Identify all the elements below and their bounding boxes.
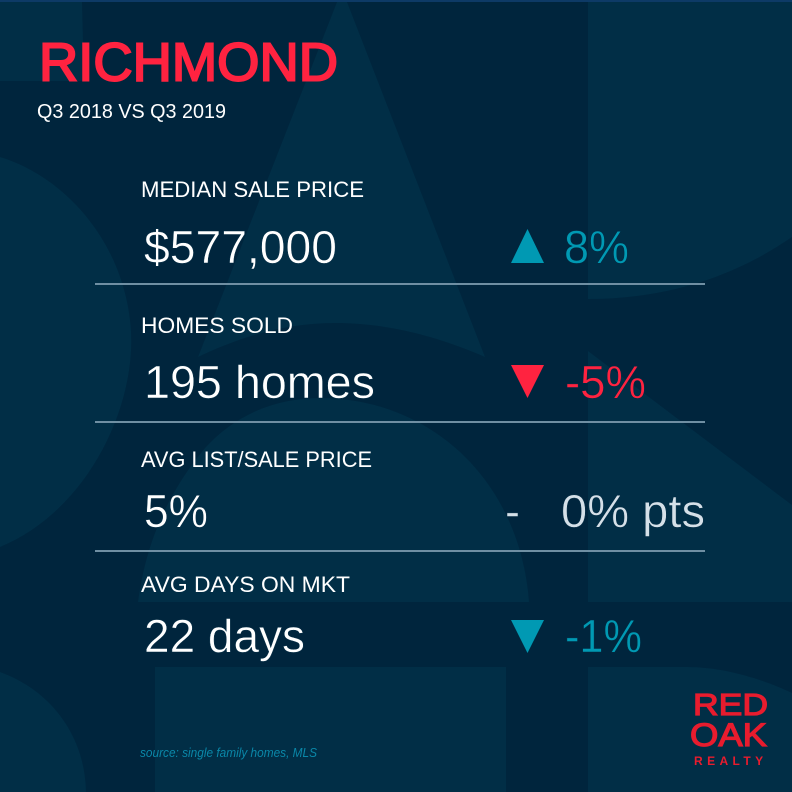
value: 22 days: 22 days — [144, 610, 305, 662]
value: median sale price: $577,000 — [144, 221, 337, 273]
change: -5%: -5% — [565, 356, 646, 408]
logo: Red Oak Realty: REALTY — [694, 754, 768, 768]
subtitle: Q3 2018 VS Q3 2019 — [37, 101, 226, 123]
change: 8%: 8% — [564, 221, 629, 273]
icon: down triangle teal — [511, 620, 544, 653]
icon: up triangle — [511, 229, 544, 263]
title: RICHMOND — [39, 32, 338, 92]
panel: average list to sale price — [141, 447, 705, 537]
label: homes sold: HOMES SOLD — [141, 313, 293, 338]
label: avg days on mkt: AVG DAYS ON MKT — [141, 572, 350, 597]
source note: source: single family homes, MLS — [140, 745, 317, 760]
logo: Red Oak Realty: OAK — [690, 717, 767, 753]
panel: homes sold — [141, 313, 646, 408]
logo: Red Oak Realty — [690, 687, 768, 768]
panel: average days on market — [141, 572, 642, 662]
icon: down triangle red — [511, 365, 544, 398]
panel: median sale price — [141, 177, 629, 273]
change: -1%: -1% — [565, 610, 642, 662]
value: 5%: 5% — [144, 485, 208, 537]
change: 0% pts: 0% pts — [561, 485, 705, 537]
label: median sale price: MEDIAN SALE PRICE — [141, 177, 364, 202]
label: avg list/sale price: AVG LIST/SALE PRICE — [141, 447, 372, 472]
logo: Red Oak Realty: RED — [693, 687, 768, 722]
change: no change dash: - — [505, 485, 520, 537]
value: homes sold: 195 homes — [144, 356, 375, 408]
